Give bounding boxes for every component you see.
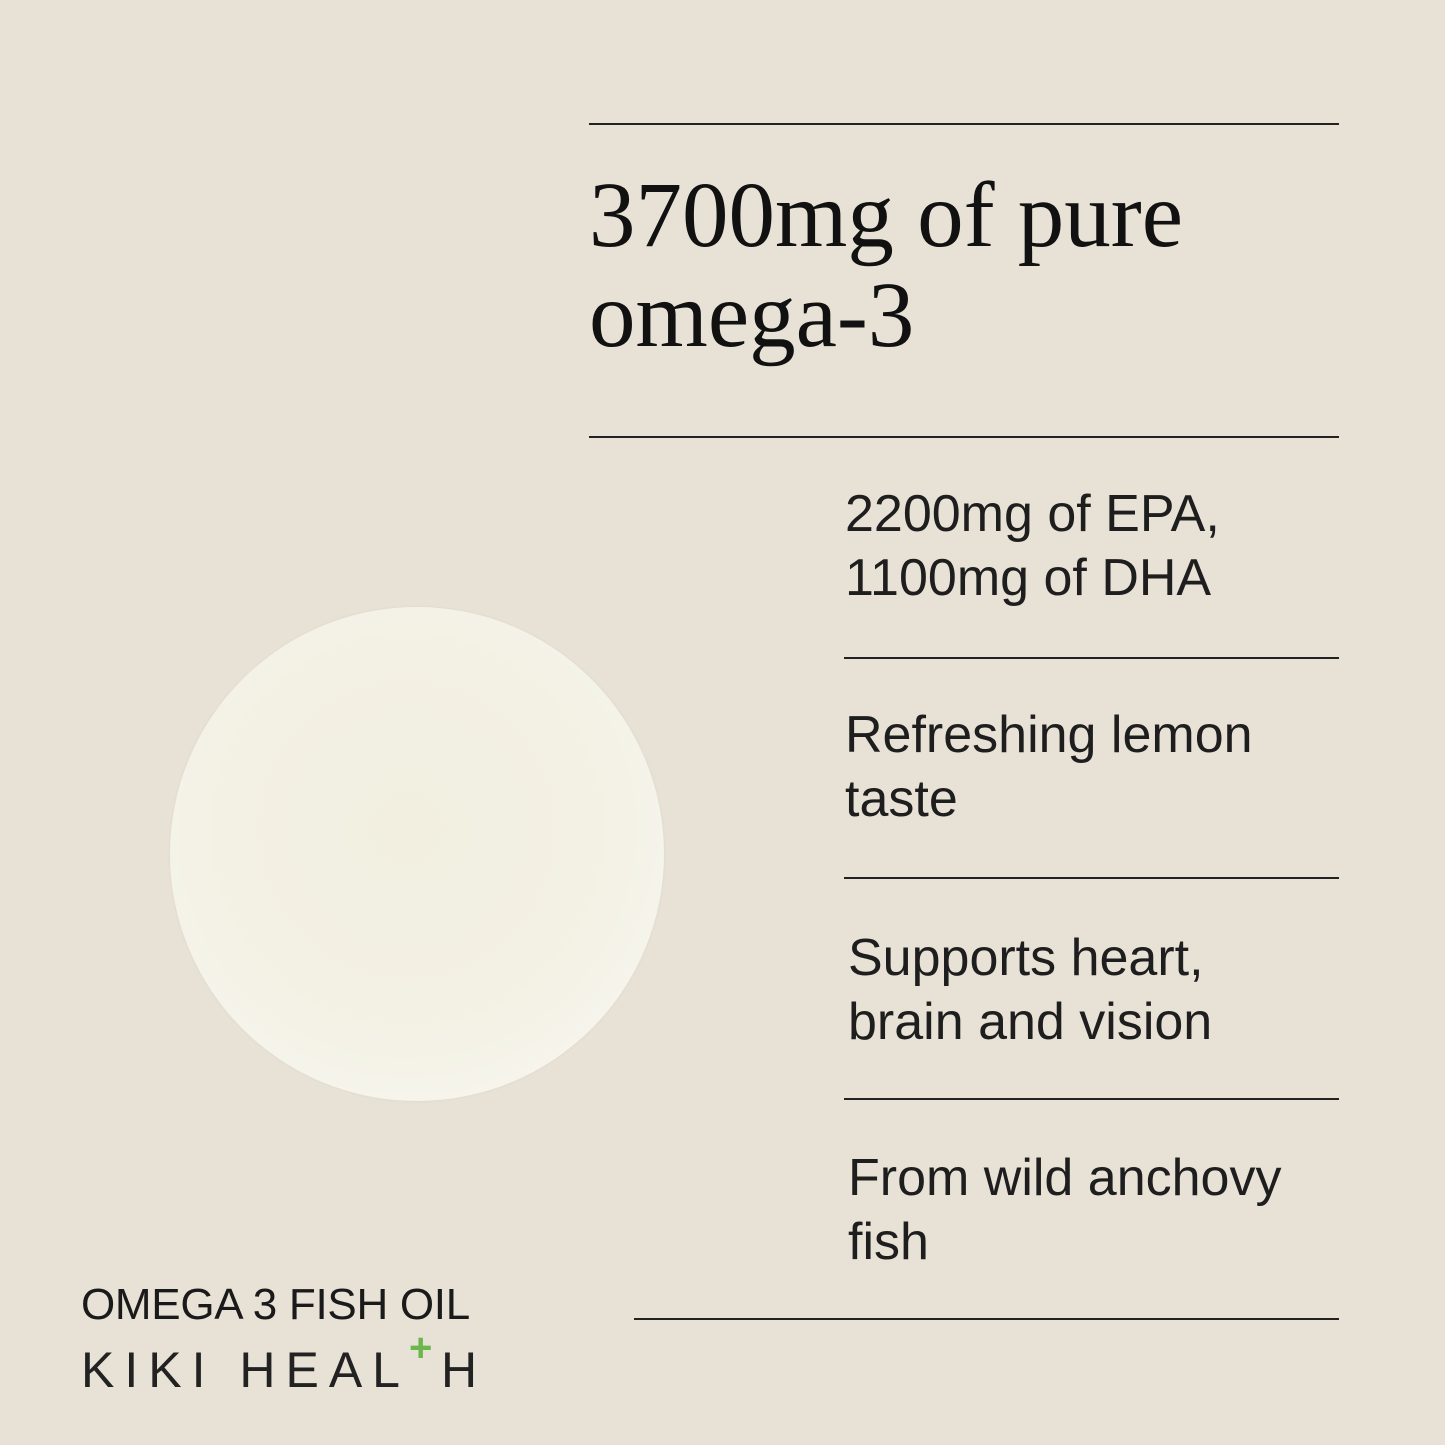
text: heart: brain and vision (848, 993, 1212, 1051)
text: anchovy: fish (848, 1213, 929, 1271)
text: EPA DHA: 1100mg of DHA (845, 549, 1211, 607)
text: EPA DHA: 2200mg of EPA, (845, 485, 1220, 543)
text: lemon (845, 706, 1253, 828)
text: anchovy: From wild anchovy (848, 1149, 1281, 1207)
logo (81, 1326, 477, 1398)
title: 3700mg of pure (589, 164, 1183, 267)
title: omega-3 (589, 264, 914, 367)
text: EPA DHA (845, 485, 1220, 607)
logo: H (441, 1342, 477, 1398)
text: heart: Supports heart, (848, 929, 1204, 987)
title (589, 164, 1183, 367)
logo: + (409, 1326, 432, 1370)
product name: OMEGA 3 FISH OIL (81, 1280, 470, 1329)
text: heart (848, 929, 1212, 1051)
text: anchovy (848, 1149, 1282, 1271)
oil drop (170, 607, 664, 1101)
logo: KIKI HEAL (81, 1342, 410, 1398)
text: lemon: Refreshing lemon (845, 706, 1253, 764)
text: lemon: taste (845, 770, 958, 828)
